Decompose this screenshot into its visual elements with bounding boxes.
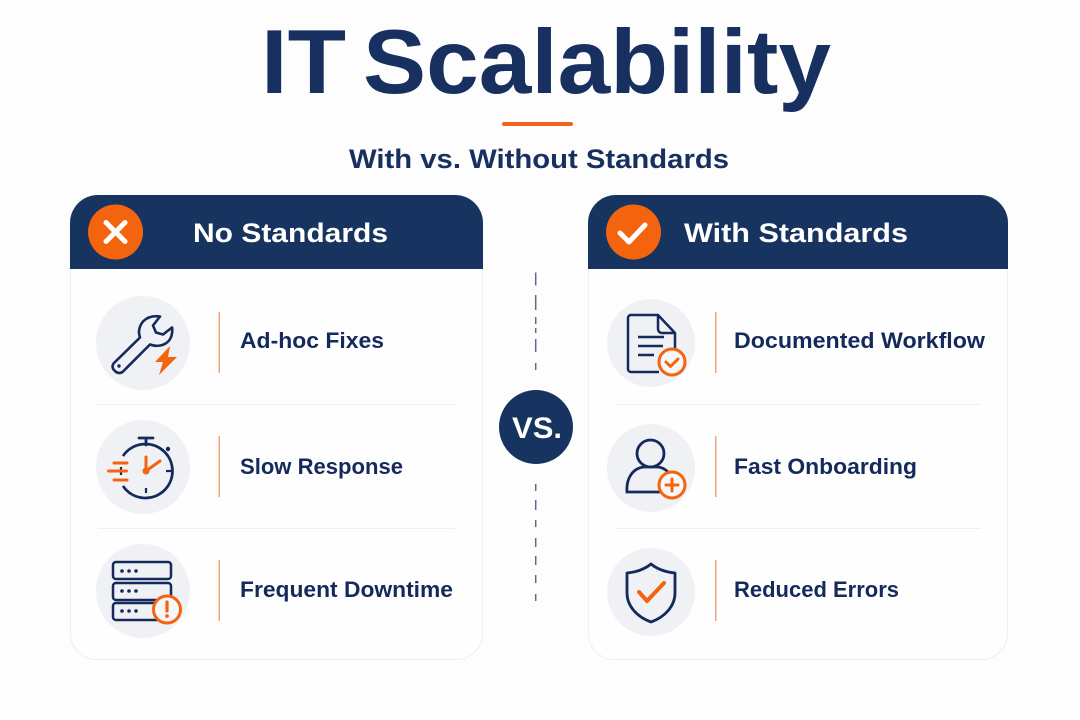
divider xyxy=(218,312,220,373)
divider xyxy=(218,560,220,621)
label: Ad-hoc Fixes xyxy=(240,328,384,353)
icon: server alert xyxy=(96,544,190,638)
label: Reduced Errors xyxy=(734,577,899,602)
row: ad-hoc fixes xyxy=(96,296,384,390)
divider xyxy=(715,312,716,373)
icon: user plus xyxy=(607,424,695,512)
icon: stopwatch xyxy=(96,420,190,514)
title accent rule xyxy=(502,122,573,126)
label: Documented Workflow xyxy=(734,328,986,353)
icon: shield check xyxy=(607,548,695,636)
row: documented workflow xyxy=(607,299,986,387)
icon: document check xyxy=(607,299,695,387)
row: slow response xyxy=(96,420,403,514)
divider xyxy=(715,560,716,621)
label: Frequent Downtime xyxy=(240,577,453,602)
vs badge xyxy=(499,390,573,464)
row: fast onboarding xyxy=(607,424,917,512)
icon: orange check badge xyxy=(606,204,661,260)
icon: orange cross badge xyxy=(88,204,143,260)
title: Scalability xyxy=(363,12,831,113)
subtitle: With vs. Without Standards xyxy=(349,144,729,174)
row: reduced errors xyxy=(607,548,899,636)
divider xyxy=(218,436,220,497)
label: Slow Response xyxy=(240,454,403,479)
label: Fast Onboarding xyxy=(734,454,917,479)
heading: no standards: No Standards xyxy=(193,218,388,248)
divider xyxy=(715,436,716,497)
heading: with standards: With Standards xyxy=(684,218,908,248)
icon: wrench and bolt xyxy=(96,296,190,390)
panel header: with standards xyxy=(588,195,1008,269)
panel: no standards xyxy=(70,195,483,660)
row: frequent downtime xyxy=(96,544,453,638)
center dashed line xyxy=(535,272,537,601)
vs badge: VS. xyxy=(512,412,562,445)
panel: with standards xyxy=(588,195,1008,660)
title: IT xyxy=(261,12,346,113)
panel header: no standards xyxy=(70,195,483,269)
